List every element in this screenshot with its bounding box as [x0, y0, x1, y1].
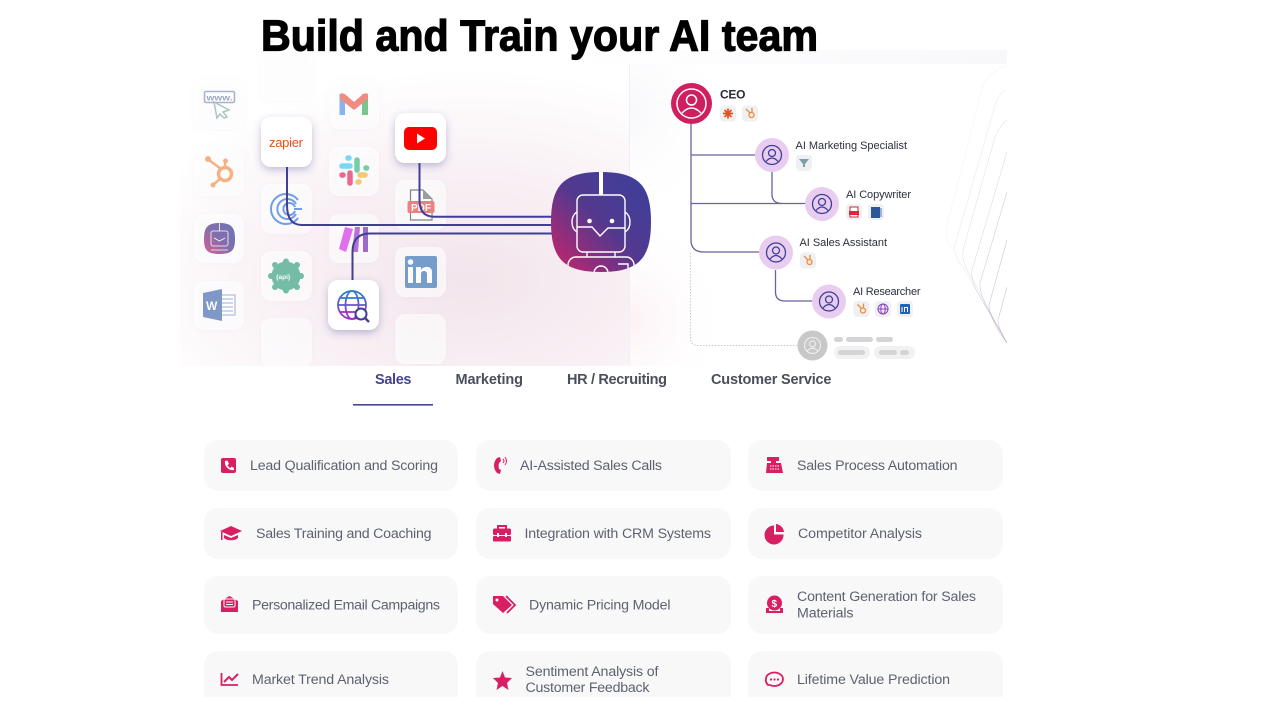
node: CEO	[671, 83, 758, 124]
card: AI-Assisted Sales Calls: AI-Assisted Sales Calls	[520, 458, 662, 474]
node: AI Researcher	[812, 284, 921, 318]
card: Competitor Analysis	[764, 524, 922, 544]
title: Build and Train your AI team	[261, 12, 818, 60]
node: AI Marketing Specialist: AI Marketing Specialist	[796, 140, 907, 152]
icon: www cursor: www.	[205, 92, 232, 102]
card: Dynamic Pricing Model: Dynamic Pricing Model	[529, 598, 670, 614]
card: Competitor Analysis: Competitor Analysis	[798, 526, 922, 542]
card: Lifetime Value Prediction: Lifetime Value Prediction	[797, 672, 950, 688]
org connector lines	[690, 123, 813, 346]
icon: word document	[203, 289, 235, 321]
card: Dynamic Pricing Model	[493, 595, 670, 614]
card: Lifetime Value Prediction	[748, 651, 1003, 709]
card: Personalized Email Campaigns: Personalized Email Campaigns	[252, 598, 440, 614]
tile: web search	[328, 280, 379, 330]
decorative hexagon outlines	[947, 65, 1007, 343]
card: Lead Qualification and Scoring: Lead Qualification and Scoring	[250, 458, 438, 474]
connector lines	[287, 163, 552, 281]
icon: api gear: {api}	[276, 274, 291, 281]
icon: slack	[342, 158, 366, 183]
navigation tabs	[353, 372, 832, 406]
icon: calendly style C	[271, 194, 302, 224]
card: Market Trend Analysis: Market Trend Analysis	[252, 672, 389, 688]
org chart panel	[629, 64, 1007, 366]
sales use case cards	[220, 456, 976, 692]
node: placeholder	[798, 330, 915, 360]
icon: hubspot	[206, 156, 232, 187]
node: AI Researcher: AI Researcher	[853, 286, 921, 298]
node: AI Sales Assistant	[759, 236, 887, 270]
robot avatar	[551, 172, 651, 272]
icon: gmail	[340, 93, 368, 115]
icon: make logo	[339, 227, 368, 252]
navigation tabs: HR / Recruiting	[567, 372, 667, 388]
icon: small robot	[204, 222, 235, 254]
node: CEO: CEO	[720, 88, 746, 102]
card: Content Generation for Sales Materials: Materials	[797, 606, 854, 622]
navigation tabs: Sales	[375, 372, 412, 388]
card: Content Generation for Sales Materials: Content Generation for Sales	[797, 589, 976, 605]
card: Sentiment Analysis of Customer Feedback: Customer Feedback	[526, 680, 650, 696]
icon: linkedin	[405, 256, 437, 288]
icon: api gear	[268, 258, 304, 294]
hero illustration panel	[180, 50, 1007, 368]
card: Sales Training and Coaching: Sales Training and Coaching	[256, 526, 432, 542]
card: Sales Process Automation: Sales Process Automation	[797, 458, 958, 474]
navigation tabs: Customer Service	[711, 372, 832, 388]
icon: word document: W	[206, 299, 218, 313]
app icon grid	[203, 90, 446, 364]
card: Content Generation for Sales Materials	[766, 591, 976, 618]
navigation tabs: Marketing	[456, 372, 523, 388]
node: AI Copywriter	[805, 187, 911, 221]
tile: zapier	[261, 117, 312, 167]
card: Sentiment Analysis of Customer Feedback: Sentiment Analysis of	[526, 664, 659, 680]
icon: pdf: PDF	[411, 203, 431, 214]
card: Content Generation for Sales Materials: $	[772, 599, 778, 610]
card: Sentiment Analysis of Customer Feedback	[493, 666, 658, 692]
icon: www cursor	[204, 92, 234, 118]
node: AI Sales Assistant: AI Sales Assistant	[800, 237, 887, 249]
card: Integration with CRM Systems: Integration with CRM Systems	[524, 526, 711, 542]
org chart	[671, 83, 921, 360]
tile: zapier: zapier	[269, 135, 304, 150]
tile: youtube	[395, 113, 446, 163]
node: AI Copywriter: AI Copywriter	[846, 189, 911, 201]
node: AI Marketing Specialist	[755, 138, 907, 172]
icon: pdf	[408, 190, 434, 220]
